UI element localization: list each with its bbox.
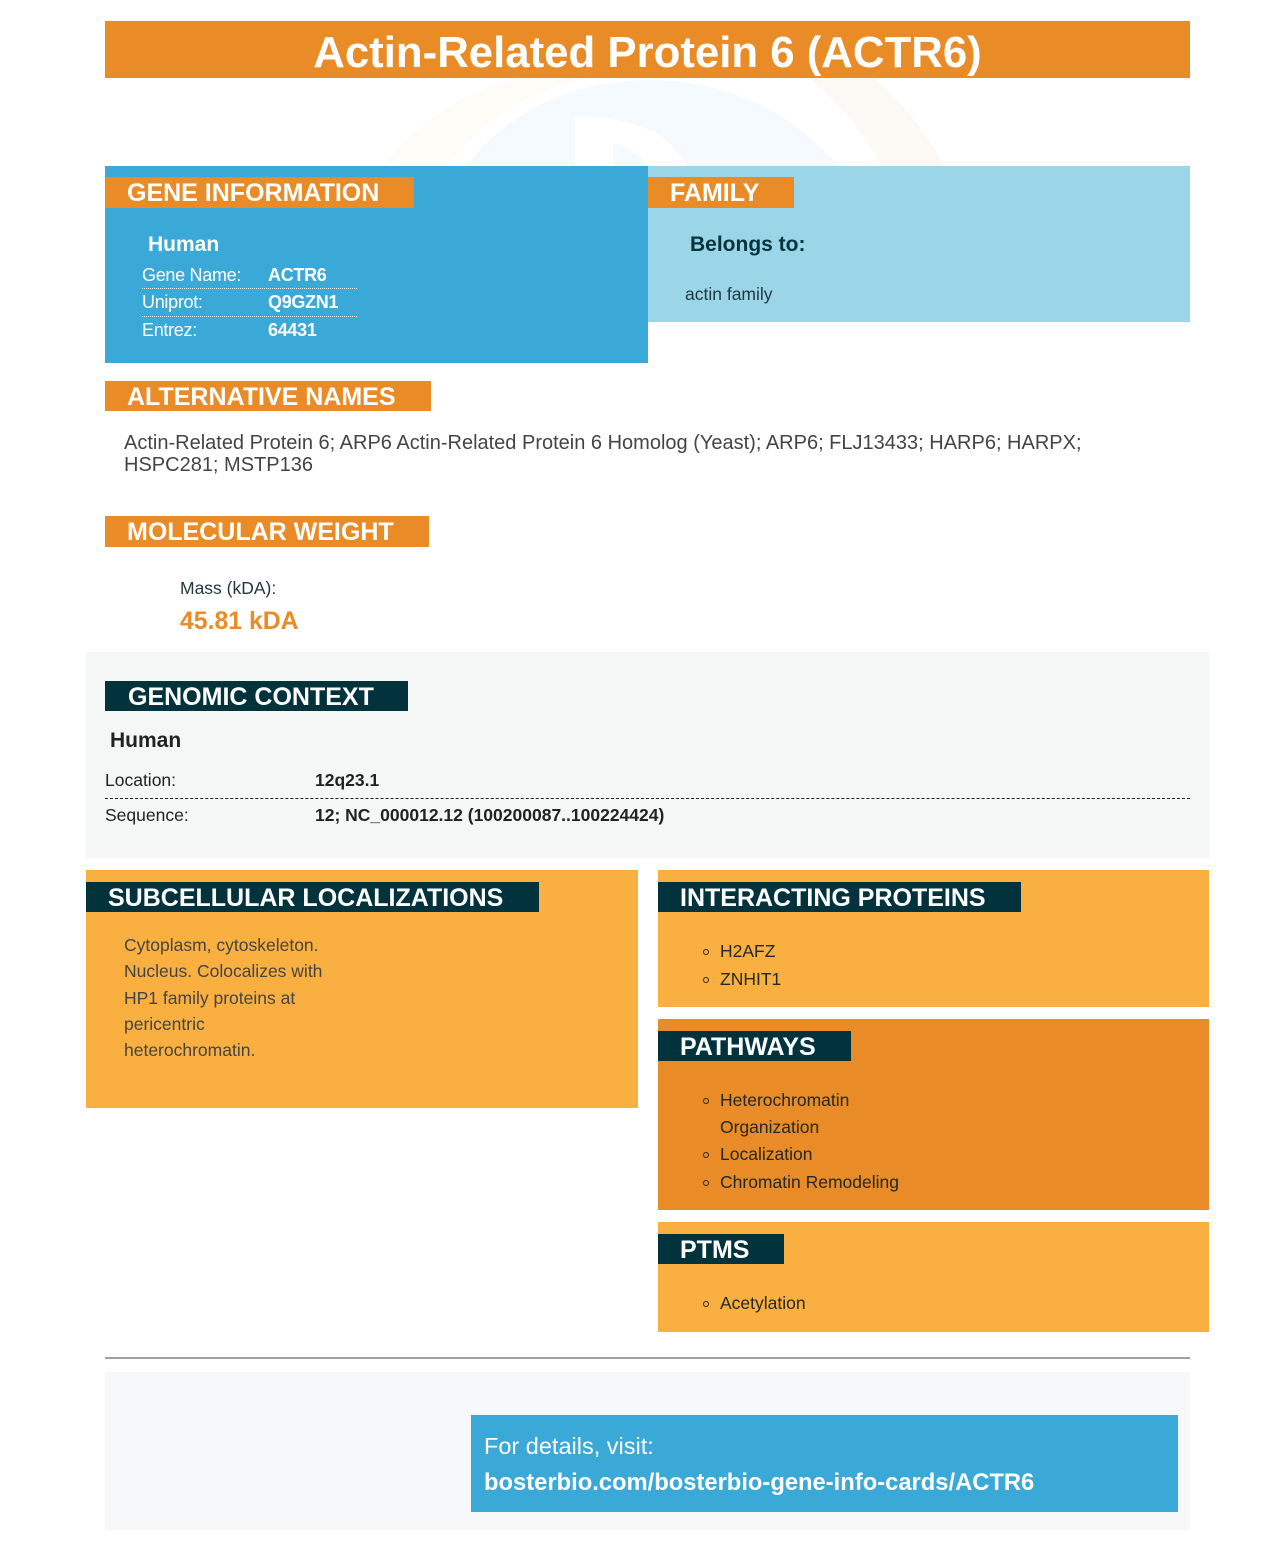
alternative names text: Actin-Related Protein 6; ARP6 Actin-Related Protein 6 Homolog (Yeast); ARP6; FLJ13433; HARP6; HARPX; bbox=[124, 432, 1082, 454]
heading: molecular weight: MOLECULAR WEIGHT bbox=[127, 518, 394, 546]
gene name row: ACTR6 bbox=[268, 265, 327, 285]
list: pathways: Heterochromatin bbox=[720, 1090, 849, 1110]
list: interacting proteins: ZNHIT1 bbox=[720, 969, 781, 989]
list: pathways: Organization bbox=[720, 1117, 819, 1137]
heading: pathways: PATHWAYS bbox=[680, 1033, 816, 1061]
heading: family bbox=[648, 177, 794, 208]
title banner bbox=[105, 21, 1190, 78]
callout label: For details, visit: bbox=[484, 1433, 654, 1459]
entrez row: Entrez: bbox=[142, 320, 197, 340]
uniprot row: Uniprot: bbox=[142, 292, 203, 312]
list: interacting proteins: H2AFZ bbox=[720, 941, 775, 961]
gene name row bbox=[142, 261, 357, 289]
list: pathways: Chromatin Remodeling bbox=[720, 1172, 899, 1192]
belongs to label: Belongs to: bbox=[690, 233, 806, 256]
panel: interacting proteins bbox=[658, 870, 1209, 1007]
entrez row: 64431 bbox=[268, 320, 317, 340]
heading: pathways bbox=[658, 1031, 851, 1061]
callout: details link bbox=[471, 1415, 1178, 1512]
heading: genomic context: GENOMIC CONTEXT bbox=[128, 683, 374, 711]
panel: family bbox=[648, 166, 1190, 322]
panel: ptms bbox=[658, 1222, 1209, 1332]
heading: family: FAMILY bbox=[670, 179, 759, 207]
heading: ptms bbox=[658, 1234, 784, 1264]
heading: ptms: PTMS bbox=[680, 1236, 749, 1264]
species label: Human bbox=[148, 233, 219, 256]
heading: gene information: GENE INFORMATION bbox=[127, 179, 379, 207]
family value: actin family bbox=[685, 284, 773, 304]
title banner: Actin-Related Protein 6 (ACTR6) bbox=[313, 28, 982, 77]
alternative names text: HSPC281; MSTP136 bbox=[124, 454, 313, 476]
species label: Human bbox=[110, 729, 181, 752]
gene name row: Gene Name: bbox=[142, 265, 241, 285]
localization text: heterochromatin. bbox=[124, 1040, 255, 1060]
list: pathways bbox=[703, 1090, 899, 1192]
panel: gene information bbox=[105, 166, 648, 363]
alternative names text bbox=[124, 432, 1082, 476]
heading: subcellular localizations: SUBCELLULAR LOCALIZATIONS bbox=[108, 884, 503, 912]
uniprot row bbox=[142, 289, 357, 317]
panel: footer bbox=[105, 1372, 1190, 1530]
list: pathways: Localization bbox=[720, 1144, 812, 1164]
panel: genomic context bbox=[86, 652, 1209, 858]
sequence row: 12; NC_000012.12 (100200087..100224424) bbox=[315, 805, 664, 825]
uniprot row: Q9GZN1 bbox=[268, 292, 338, 312]
mass label: Mass (kDA): bbox=[180, 578, 276, 598]
location row bbox=[105, 764, 1190, 799]
heading: interacting proteins: INTERACTING PROTEINS bbox=[680, 884, 986, 912]
localization text bbox=[124, 935, 322, 1060]
panel: subcellular localizations bbox=[86, 870, 638, 1108]
entrez row bbox=[142, 320, 317, 340]
heading: alternative names: ALTERNATIVE NAMES bbox=[127, 383, 396, 411]
watermark logo bbox=[466, 78, 944, 166]
mass value: 45.81 kDA bbox=[180, 608, 299, 635]
list: ptms: Acetylation bbox=[720, 1293, 806, 1313]
localization text: Cytoplasm, cytoskeleton. bbox=[124, 935, 319, 955]
sequence row bbox=[105, 805, 664, 825]
location row: Location: bbox=[105, 770, 176, 790]
localization text: Nucleus. Colocalizes with bbox=[124, 961, 322, 981]
localization text: HP1 family proteins at bbox=[124, 988, 295, 1008]
callout url: bosterbio.com/bosterbio-gene-info-cards/ACTR6 bbox=[484, 1469, 1034, 1496]
location row: 12q23.1 bbox=[315, 770, 379, 790]
panel: pathways bbox=[658, 1019, 1209, 1210]
localization text: pericentric bbox=[124, 1014, 205, 1034]
list: interacting proteins bbox=[703, 941, 781, 989]
sequence row: Sequence: bbox=[105, 805, 189, 825]
